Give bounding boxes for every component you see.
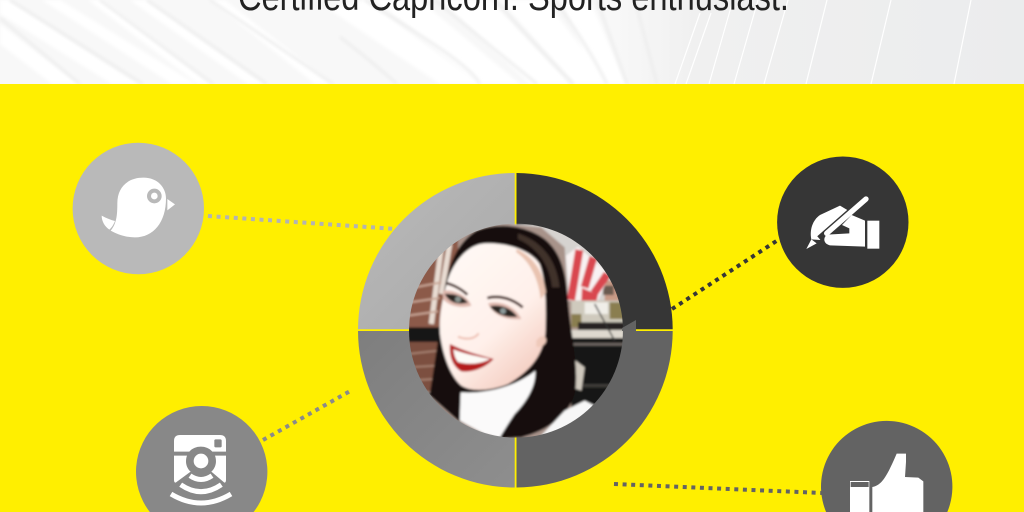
ring segment: top left xyxy=(358,173,515,329)
camera badge xyxy=(136,406,267,512)
building top right xyxy=(511,224,611,302)
icon: thumbs up xyxy=(850,454,923,512)
ring segment: bottom right xyxy=(516,331,673,488)
ring arrow tip xyxy=(622,320,636,331)
face xyxy=(440,243,546,390)
eye shading xyxy=(443,290,471,307)
nose shadow xyxy=(458,333,479,339)
circle: writing xyxy=(777,156,908,288)
eyes xyxy=(445,294,468,304)
eyebrows xyxy=(447,283,467,295)
circle: thumbs up xyxy=(821,421,952,512)
brick wall xyxy=(408,224,458,391)
header background with architectural stripes xyxy=(0,0,1024,84)
dotted connector: thumbs up xyxy=(614,484,822,493)
portrait photo xyxy=(408,224,624,438)
dotted connector: camera xyxy=(263,390,352,440)
circle: camera xyxy=(136,406,267,512)
ring segment: bottom left xyxy=(358,331,515,488)
lips and teeth xyxy=(450,344,494,372)
dotted connector: bird xyxy=(208,216,396,229)
icon: camera with signal xyxy=(171,435,231,503)
thumbs up badge xyxy=(821,421,952,512)
icon: hand writing xyxy=(806,199,879,249)
bird badge xyxy=(73,143,204,274)
donut ring xyxy=(358,173,673,488)
cafe railing and tables xyxy=(569,299,623,408)
right shoulder xyxy=(540,401,595,437)
dotted connector: writing xyxy=(672,240,778,309)
writing badge xyxy=(777,156,908,288)
ring segment: top right xyxy=(516,173,673,329)
striped flag xyxy=(566,247,610,301)
circle: bird xyxy=(73,143,204,274)
hair xyxy=(428,226,576,438)
photo backdrop xyxy=(428,224,580,438)
turtleneck xyxy=(460,371,535,438)
icon: bird xyxy=(102,178,175,237)
